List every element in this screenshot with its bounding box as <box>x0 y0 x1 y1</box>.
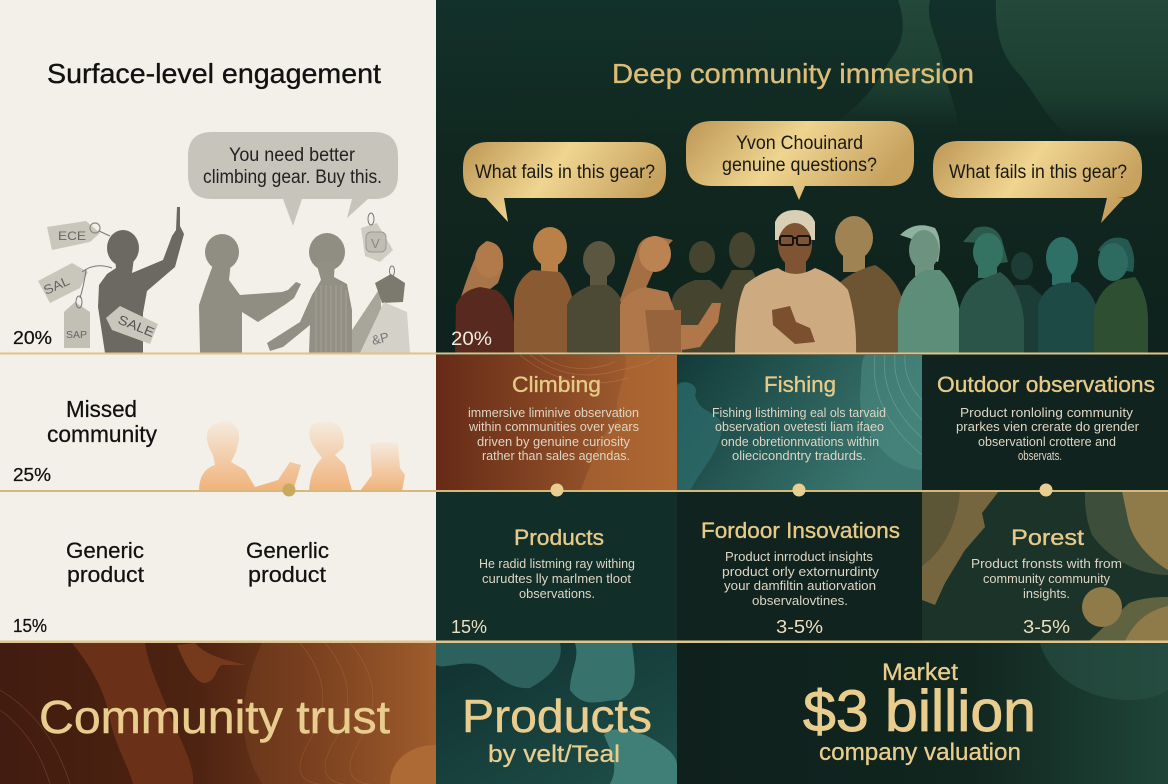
speech bubble: you need better climbing gear: climbing gear. Buy this. <box>203 167 382 188</box>
generic product text 1: Generic <box>66 538 144 563</box>
figure: man with striped shirt <box>267 233 352 353</box>
speech bubble: what fails left <box>463 142 666 222</box>
panel: products: 15% <box>451 617 487 637</box>
person: woman with cap <box>620 236 721 353</box>
timeline dot: outdoor <box>1040 484 1052 496</box>
panel: climbing: Climbing <box>512 372 601 397</box>
panel: market valuation: company valuation <box>819 739 1021 766</box>
panel: fordoor insovations <box>677 491 922 641</box>
panel: climbing: within communities over years <box>468 419 639 434</box>
panel: climbing: driven by genuine curiosity <box>477 434 630 449</box>
panel: outdoor observations: observats. <box>1018 448 1062 463</box>
stat: left 15%: 15% <box>13 616 47 636</box>
panel: outdoor observations <box>922 355 1168 491</box>
stat: left 20%: 20% <box>13 328 52 348</box>
panel: products by teal: by velt/Teal <box>488 741 620 768</box>
speech bubble: yvon chouinard <box>686 121 914 200</box>
panel: fordoor insovations: 3-5% <box>776 617 823 637</box>
panel: products <box>436 491 677 641</box>
generic product text 2: Generlic <box>246 538 329 563</box>
price tags: left cluster: SAP <box>66 330 87 341</box>
speech bubble: what fails right <box>933 141 1142 223</box>
price tags: left cluster: SAL <box>41 273 72 298</box>
panel: products: He radid listming ray withing <box>479 556 635 571</box>
timeline dot: climbing <box>550 484 564 496</box>
panel: market valuation <box>677 643 1168 784</box>
panel: community trust: Community trust <box>39 691 390 743</box>
generic product text 2 <box>246 538 329 587</box>
panel: fishing: oliecicondntry tradurds. <box>732 448 866 463</box>
stat: left 25%: 25% <box>13 465 51 485</box>
panel: fordoor insovations: product orly extornurdinty <box>722 564 880 579</box>
panel: forest: Product fronsts with from <box>971 556 1122 571</box>
stat: right 20%: 20% <box>451 329 492 350</box>
price tags: left cluster <box>38 221 158 348</box>
price tags: left cluster: ECE <box>58 229 86 243</box>
person: teal man <box>1038 237 1099 353</box>
title: surface-level engagement: Surface-level engagement <box>47 58 381 89</box>
panel: climbing <box>436 355 677 491</box>
panel: fishing: observation ovetesti liam ifaeo <box>715 419 884 434</box>
panel: forest: Porest <box>1011 525 1084 550</box>
speech bubble: you need better climbing gear <box>188 132 398 226</box>
speech bubble: what fails left: What fails in this gear? <box>475 162 655 183</box>
panel: community trust <box>0 643 436 784</box>
generic product text 2: product <box>248 562 326 587</box>
person: man light green <box>898 225 961 353</box>
panel: market valuation: Market <box>882 659 958 686</box>
panel: market valuation: $3 billion <box>803 679 1036 744</box>
speech bubble: yvon chouinard: genuine questions? <box>722 155 877 176</box>
figure: man pointing up <box>98 207 184 353</box>
panel: outdoor observations: Product ronloling community <box>960 405 1134 420</box>
speech bubble: yvon chouinard: Yvon Chouinard <box>736 133 863 154</box>
panel: left background <box>0 0 436 643</box>
panel: outdoor observations: prarkes vien crerate do grender <box>956 419 1140 434</box>
panel: products: Products <box>514 525 604 550</box>
person: background olive 2 <box>716 232 760 353</box>
person: man with cap <box>959 226 1024 353</box>
panel: right background <box>436 0 1168 355</box>
faded peach figures <box>199 421 405 491</box>
panel: fishing: Fishing <box>764 372 836 397</box>
person: background teal <box>1004 252 1047 353</box>
missed community text <box>47 396 157 447</box>
panel: products by teal <box>436 643 677 784</box>
divider lines <box>0 352 1168 643</box>
missed community text: Missed <box>66 396 137 422</box>
panel: climbing: rather than sales agendas. <box>482 448 630 463</box>
panel: forest: insights. <box>1023 586 1070 601</box>
speech bubble: what fails right: What fails in this gear? <box>949 162 1127 183</box>
title: deep community immersion: Deep community immersion <box>612 58 974 89</box>
panel: products: curudtes lly marlmen tloot <box>482 571 631 586</box>
icon: hanging bag and tag: &P <box>370 329 391 348</box>
panel: forest: 3-5% <box>1023 617 1070 637</box>
panel: products by teal: Products <box>462 690 652 742</box>
panel: fishing <box>677 355 922 491</box>
timeline dot: fishing <box>792 484 806 496</box>
timeline dot: left <box>282 484 296 496</box>
figure: man offering phone <box>199 234 301 353</box>
panel: forest: community community <box>983 571 1110 586</box>
panel: outdoor observations: observationl crottere and <box>978 434 1116 449</box>
person: man brown <box>514 227 574 353</box>
panel: fordoor insovations: Product inrroduct insights <box>725 549 873 564</box>
person: teal woman <box>1094 238 1148 353</box>
icon: hanging bag and tag: V <box>371 236 380 251</box>
missed community text: community <box>47 421 157 447</box>
person: yvon chouinard <box>735 210 856 353</box>
person: woman maroon <box>455 241 515 353</box>
icon: hanging bag and tag <box>352 213 410 353</box>
panel: fordoor insovations: your damfiltin autiorvation <box>724 578 876 593</box>
panel: fishing: Fishing listhiming eal ols tarvaid <box>712 405 886 420</box>
panel: fishing: onde obretionnvations within <box>721 434 879 449</box>
generic product text 1 <box>66 538 144 587</box>
panel: climbing: immersive liminive observation <box>468 405 639 420</box>
panel: outdoor observations: Outdoor observations <box>937 372 1155 397</box>
panel: fordoor insovations: Fordoor Insovations <box>701 518 900 543</box>
glasses <box>780 236 810 245</box>
generic product text 1: product <box>67 562 144 587</box>
panel: forest <box>922 491 1168 641</box>
person: man olive behind <box>835 216 905 353</box>
person: background olive 1 <box>672 241 726 353</box>
person: man dark olive <box>567 241 625 353</box>
price tags: left cluster: SALE <box>116 312 157 340</box>
speech bubble: you need better climbing gear: You need better <box>229 145 356 166</box>
community crowd <box>455 210 1148 353</box>
panel: fordoor insovations: observalovtines. <box>752 593 848 608</box>
panel: products: observations. <box>519 586 595 601</box>
